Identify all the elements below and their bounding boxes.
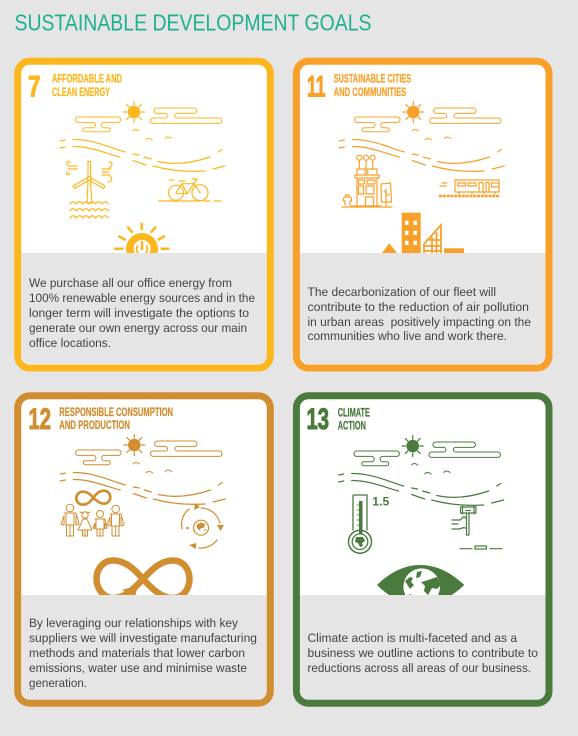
text panel — [300, 595, 546, 700]
body text: generation. — [29, 676, 87, 690]
body text: suppliers we will investigate manufacturing — [29, 631, 257, 645]
text panel — [22, 595, 268, 700]
icon: small infinity loop — [76, 491, 110, 505]
title: SUSTAINABLE DEVELOPMENT GOALS — [14, 10, 372, 36]
body text: contribute to the reduction of air pollution — [308, 300, 529, 314]
text panel — [22, 253, 268, 364]
icon: eye with globe — [377, 565, 464, 595]
panel: goal 12 responsible consumption and production — [18, 396, 270, 703]
body text: The decarbonization of our fleet will — [308, 285, 496, 299]
body text: business we outline actions to contribute to — [308, 646, 538, 660]
icon: train — [439, 180, 500, 196]
goal heading: AFFORDABLE AND — [52, 73, 122, 86]
goal heading: AND PRODUCTION — [59, 419, 130, 432]
goal heading: AND COMMUNITIES — [334, 86, 406, 99]
goal number 12: 12 — [28, 403, 51, 436]
body text: methods and materials that lower carbon — [29, 646, 245, 660]
icon: city skyline — [382, 213, 464, 255]
goal heading — [334, 73, 411, 99]
icon: large infinity loop with arrow — [96, 560, 190, 598]
panel: goal 11 sustainable cities and communities — [296, 61, 549, 368]
icon: thermometer with 1.5: 1.5 — [372, 497, 390, 509]
icon: dashed ground line — [460, 546, 502, 549]
goal heading: CLIMATE — [338, 407, 370, 420]
goal number 13: 13 — [306, 403, 329, 436]
icon: sun with power symbol — [114, 222, 170, 253]
goal heading: CLEAN ENERGY — [52, 86, 110, 99]
goal heading — [59, 406, 173, 432]
body text — [308, 285, 531, 343]
landscape with sun and clouds — [339, 436, 504, 505]
body text — [29, 616, 257, 690]
landscape with sun and clouds — [60, 102, 225, 171]
landscape with sun and clouds — [60, 434, 225, 504]
body text: emissions, water use and minimise waste — [29, 661, 247, 675]
icon: family of four — [61, 504, 124, 536]
goal heading: ACTION — [338, 420, 366, 432]
icon: wind turbine over water — [67, 161, 112, 218]
body text: By leveraging our relationships with key — [29, 616, 239, 630]
body text: generate our own energy across our main — [29, 321, 247, 335]
icon: building with lamps and tree — [342, 155, 392, 207]
goal heading — [338, 407, 370, 432]
panel: goal 7 affordable and clean energy — [18, 61, 270, 368]
text panel — [300, 253, 546, 364]
body text: office locations. — [29, 336, 111, 350]
goal number 11: 11 — [307, 71, 326, 104]
body text: in urban areas positively impacting on the — [308, 315, 531, 329]
icon: hand with gavel — [452, 506, 476, 535]
body text: We purchase all our office energy from — [29, 276, 232, 290]
goal heading: SUSTAINABLE CITIES — [334, 73, 411, 86]
goal heading — [52, 73, 122, 99]
goal number 7: 7 — [28, 71, 40, 104]
body text: longer term will investigate the options to — [29, 306, 249, 320]
body text — [308, 631, 538, 675]
body text: 100% renewable energy sources and in the — [29, 291, 255, 305]
panel: goal 13 climate action — [296, 396, 549, 703]
goal heading: RESPONSIBLE CONSUMPTION — [59, 406, 173, 419]
body text: Climate action is multi-faceted and as a — [308, 631, 517, 645]
body text — [29, 276, 255, 350]
icon: recycling cycle with globe — [182, 503, 224, 549]
icon: thermometer with 1.5 — [348, 495, 390, 553]
body text: reductions across all areas of our business. — [308, 661, 531, 675]
landscape with sun and clouds — [339, 102, 504, 171]
body text: communities who live and work there. — [308, 329, 507, 343]
icon: bicycle — [158, 179, 221, 201]
